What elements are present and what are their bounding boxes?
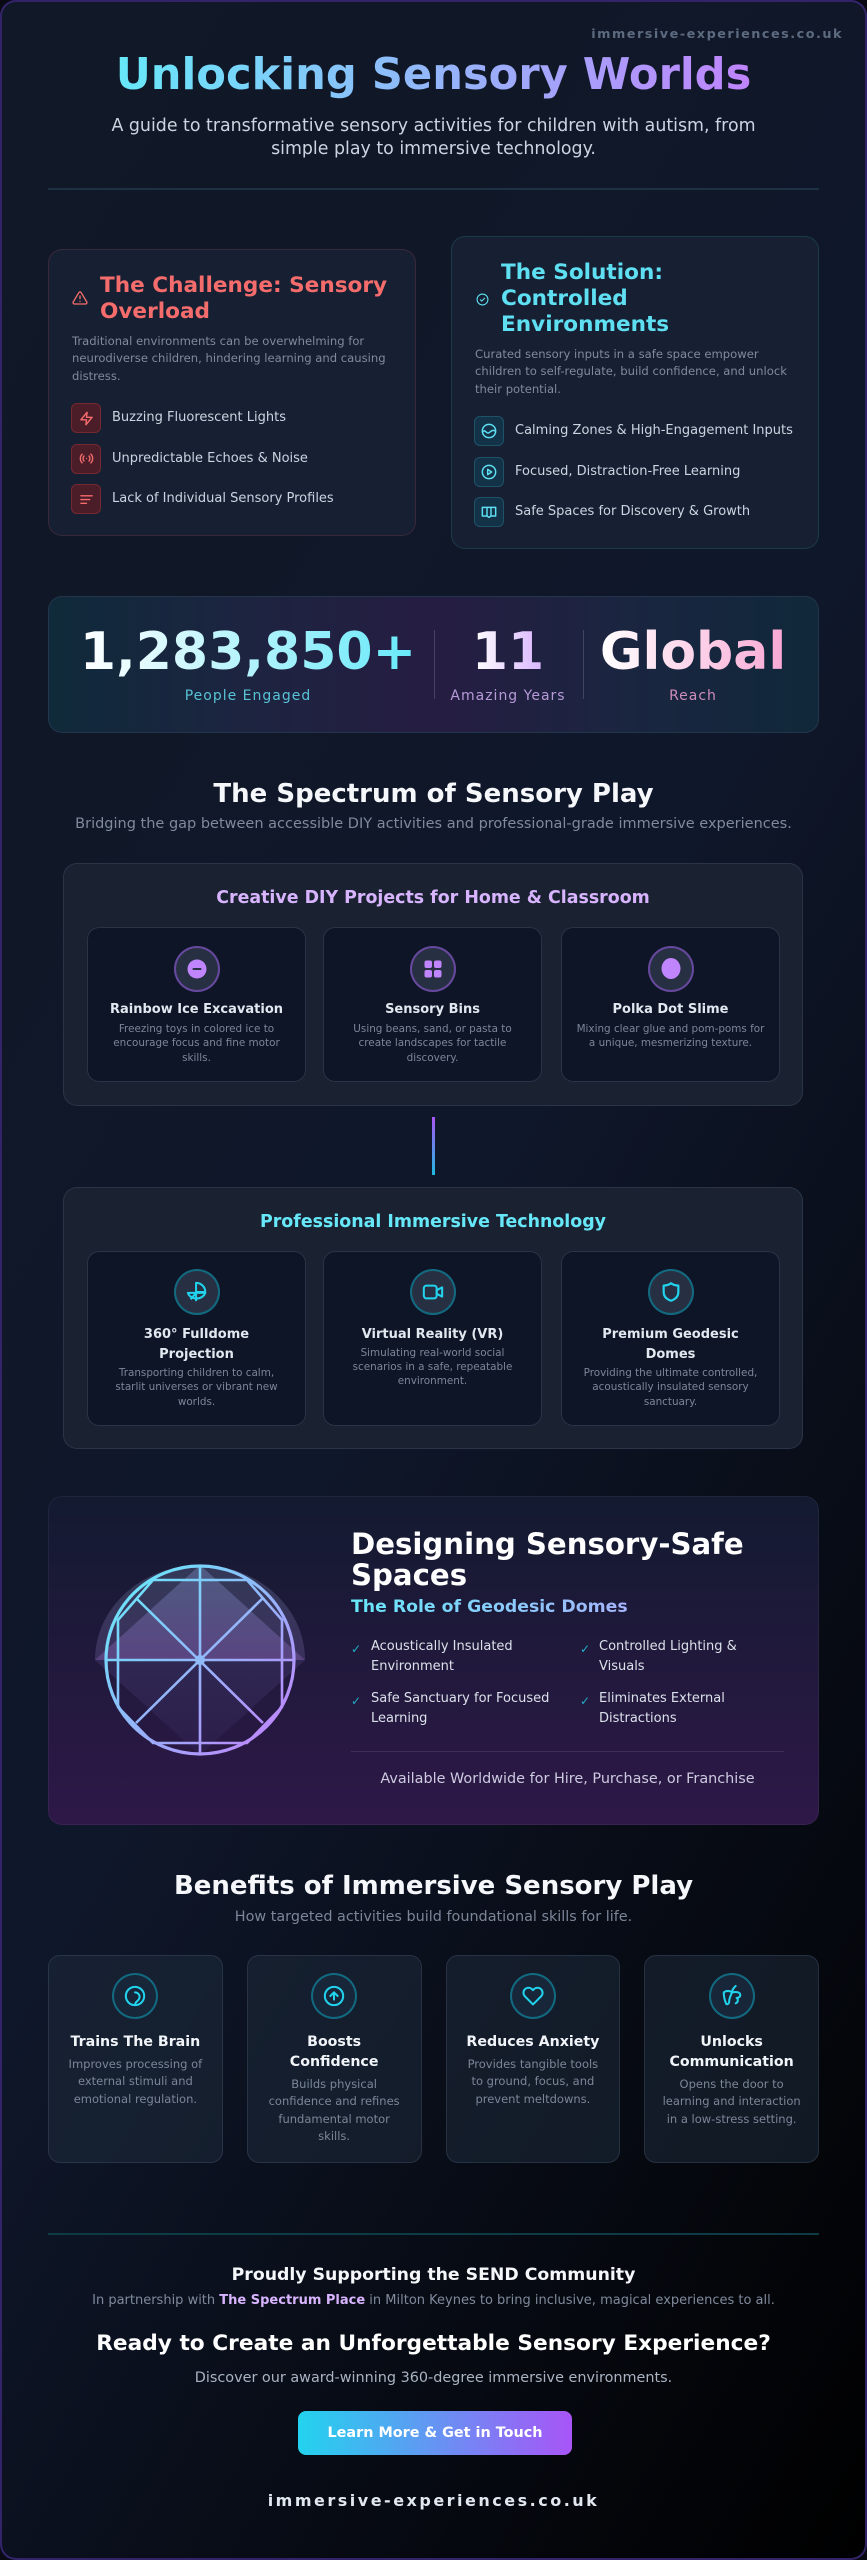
website url bottom: immersive-experiences.co.uk xyxy=(268,2491,599,2510)
button xyxy=(298,2411,572,2455)
partnership text: In partnership with The Spectrum Place in Milton Keynes to bring inclusive, magical experiences to all. xyxy=(92,2293,775,2308)
challenge description: distress. xyxy=(72,369,121,383)
card: geodesic domes: Premium Geodesic xyxy=(602,1327,739,1342)
card: rainbow ice: encourage focus and fine motor xyxy=(113,1037,280,1049)
card: sensory bins: Sensory Bins xyxy=(385,1002,480,1017)
feature 3: Safe Sanctuary for Focused xyxy=(371,1690,549,1706)
card: fulldome: Projection xyxy=(159,1347,234,1362)
icon: grid xyxy=(410,946,456,992)
card: boosts confidence: confidence and refines xyxy=(269,2094,400,2108)
challenge item 3: Lack of Individual Sensory Profiles xyxy=(112,491,334,506)
card: boosts confidence: Confidence xyxy=(290,2054,378,2070)
challenge heading: Overload xyxy=(100,299,210,324)
card: virtual reality: environment. xyxy=(398,1375,467,1387)
stat: amazing years: 11 xyxy=(472,622,544,682)
icon: warning triangle xyxy=(72,291,88,305)
icon: check circle xyxy=(476,294,488,306)
feature 3: Learning xyxy=(371,1711,427,1726)
card: boosts confidence: fundamental motor xyxy=(278,2112,390,2126)
card: virtual reality: scenarios in a safe, repeatable xyxy=(353,1361,512,1373)
panel: statistics xyxy=(48,596,819,733)
icon: calm sphere xyxy=(474,416,504,446)
solution description: their potential. xyxy=(475,382,561,396)
website url top right: immersive-experiences.co.uk xyxy=(591,27,843,42)
stat: people engaged: 1,283,850+ xyxy=(80,622,416,682)
solution description: Curated sensory inputs in a safe space empower xyxy=(475,347,759,361)
feature 4: Distractions xyxy=(599,1711,677,1726)
card: fulldome: worlds. xyxy=(178,1396,215,1408)
challenge description: neurodiverse children, hindering learning and causing xyxy=(72,351,386,365)
card: polka dot slime: Polka Dot Slime xyxy=(613,1002,728,1017)
feature 3 xyxy=(371,1690,549,1726)
solution item 3: Safe Spaces for Discovery & Growth xyxy=(515,504,750,519)
card: unlocks communication: learning and interaction xyxy=(663,2094,801,2108)
card: trains the brain xyxy=(48,1955,223,2163)
benefits subheading: How targeted activities build foundational skills for life. xyxy=(235,1909,632,1925)
card: fulldome: Transporting children to calm, xyxy=(119,1367,274,1379)
challenge heading: The Challenge: Sensory xyxy=(100,273,387,298)
card: virtual reality xyxy=(323,1251,542,1426)
challenge heading xyxy=(100,273,387,324)
card: geodesic domes xyxy=(561,1251,780,1426)
icon: shield xyxy=(648,1269,694,1315)
card: sensory bins: discovery. xyxy=(407,1052,458,1064)
dome heading: Designing Sensory-Safe xyxy=(351,1527,744,1561)
panel: professional technology xyxy=(63,1187,803,1449)
solution item 1: Calming Zones & High-Engagement Inputs xyxy=(515,423,793,438)
geodesic dome illustration xyxy=(95,1564,305,1756)
card: polka dot slime: a unique, mesmerizing texture. xyxy=(589,1037,752,1049)
feature list: ✓ xyxy=(351,1694,361,1708)
feature 2: Visuals xyxy=(599,1659,645,1674)
card: trains the brain: emotional regulation. xyxy=(74,2092,197,2106)
card: fulldome xyxy=(87,1251,306,1426)
solution description xyxy=(475,347,787,396)
panel: DIY projects xyxy=(63,863,803,1106)
card: trains the brain: Trains The Brain xyxy=(70,2034,200,2050)
card: sensory bins: Using beans, sand, or pasta to xyxy=(353,1023,512,1035)
card: rainbow ice: Freezing toys in colored ice to xyxy=(119,1023,274,1035)
subtitle: simple play to immersive technology. xyxy=(271,138,596,158)
card: geodesic domes: Providing the ultimate controlled, xyxy=(584,1367,757,1379)
card: trains the brain: external stimuli and xyxy=(78,2074,193,2088)
card: unlocks communication: Unlocks xyxy=(700,2034,763,2050)
icon: open book xyxy=(474,497,504,527)
card: boosts confidence: Builds physical xyxy=(291,2077,377,2091)
feature 2: Controlled Lighting & xyxy=(599,1638,737,1654)
subtitle xyxy=(111,116,756,158)
stat: global reach: Global xyxy=(600,622,786,682)
panel: solution xyxy=(451,236,819,549)
challenge description: Traditional environments can be overwhelming for xyxy=(72,334,364,348)
DIY heading: Creative DIY Projects for Home & Classroom xyxy=(216,888,650,908)
icon: video camera xyxy=(410,1269,456,1315)
icon: uneven lines xyxy=(71,484,101,514)
solution heading: Environments xyxy=(501,312,669,337)
card: polka dot slime: Mixing clear glue and pom-poms for xyxy=(577,1023,764,1035)
card: boosts confidence xyxy=(247,1955,422,2163)
stat: amazing years xyxy=(450,622,566,704)
feature 2 xyxy=(599,1638,737,1674)
dome subheading: The Role of Geodesic Domes xyxy=(351,1597,628,1617)
card: reduces anxiety: Provides tangible tools xyxy=(468,2057,598,2071)
solution heading xyxy=(501,260,669,337)
card: virtual reality: Virtual Reality (VR) xyxy=(362,1327,503,1342)
card: unlocks communication: Opens the door to xyxy=(680,2077,784,2091)
feature 1: Acoustically Insulated xyxy=(371,1638,513,1654)
spectrum heading: The Spectrum of Sensory Play xyxy=(213,779,654,809)
card: virtual reality: Simulating real-world social xyxy=(361,1346,504,1358)
solution description: children to self-regulate, build confidence, and unlock xyxy=(475,364,787,378)
card: fulldome: starlit universes or vibrant new xyxy=(115,1381,278,1393)
feature list xyxy=(351,1638,737,1726)
card: boosts confidence: Boosts xyxy=(307,2034,361,2050)
feature list: ✓ xyxy=(351,1642,361,1656)
card: reduces anxiety: Reduces Anxiety xyxy=(466,2034,599,2050)
community heading: Proudly Supporting the SEND Community xyxy=(232,2265,635,2285)
panel: challenge xyxy=(48,249,416,536)
card: geodesic domes: sanctuary. xyxy=(644,1396,697,1408)
solution item 2: Focused, Distraction-Free Learning xyxy=(515,464,740,478)
card: reduces anxiety: prevent meltdowns. xyxy=(475,2092,590,2106)
challenge item 2: Unpredictable Echoes & Noise xyxy=(112,450,308,466)
spectrum subheading: Bridging the gap between accessible DIY activities and professional-grade immersive experiences. xyxy=(75,816,792,832)
card: rainbow ice: skills. xyxy=(182,1052,211,1064)
card: boosts confidence: skills. xyxy=(318,2129,350,2143)
title: Unlocking Sensory Worlds xyxy=(116,50,751,100)
card: rainbow ice xyxy=(87,927,306,1082)
card: fulldome: 360° Fulldome xyxy=(144,1327,249,1342)
card: trains the brain: Improves processing of xyxy=(69,2057,202,2071)
card: sensory bins: create landscapes for tactile xyxy=(359,1037,506,1049)
solution heading: The Solution: xyxy=(501,260,663,285)
card: geodesic domes: Domes xyxy=(646,1347,695,1362)
card: geodesic domes: acoustically insulated sensory xyxy=(592,1381,749,1393)
icon: arrow up circle xyxy=(311,1973,357,2019)
icon: dome projection xyxy=(174,1269,220,1315)
dome heading xyxy=(351,1527,744,1592)
feature 4 xyxy=(599,1690,725,1726)
call to action text: Discover our award-winning 360-degree immersive environments. xyxy=(195,2370,672,2386)
icon: heart xyxy=(510,1973,556,2019)
card: reduces anxiety: to ground, focus, and xyxy=(471,2074,594,2088)
card: unlocks communication: Communication xyxy=(669,2054,794,2070)
icon: brain xyxy=(709,1973,755,2019)
button: Learn More & Get in Touch xyxy=(327,2425,543,2441)
dome heading: Spaces xyxy=(351,1558,467,1592)
icon: minus circle xyxy=(174,946,220,992)
icon: lightning xyxy=(71,403,101,433)
subtitle: A guide to transformative sensory activities for children with autism, from xyxy=(111,116,756,136)
connector line xyxy=(432,1117,435,1175)
stat: global reach: Reach xyxy=(669,688,717,704)
challenge item 1: Buzzing Fluorescent Lights xyxy=(112,410,286,425)
panel: geodesic domes xyxy=(48,1496,819,1825)
availability note: Available Worldwide for Hire, Purchase, or Franchise xyxy=(380,1771,755,1787)
feature 1 xyxy=(371,1638,513,1674)
feature list: ✓ xyxy=(580,1642,590,1656)
feature 1: Environment xyxy=(371,1659,454,1674)
card: reduces anxiety xyxy=(446,1955,620,2163)
icon: slime drop xyxy=(648,946,694,992)
solution heading: Controlled xyxy=(501,286,628,311)
card: unlocks communication xyxy=(644,1955,819,2163)
stat: amazing years: Amazing Years xyxy=(450,688,566,704)
challenge description xyxy=(72,334,386,383)
icon: sound waves xyxy=(71,444,101,474)
stat: people engaged: People Engaged xyxy=(185,688,311,704)
card: sensory bins xyxy=(323,927,542,1082)
feature 4: Eliminates External xyxy=(599,1690,725,1706)
benefits heading: Benefits of Immersive Sensory Play xyxy=(174,1871,693,1901)
card: rainbow ice: Rainbow Ice Excavation xyxy=(110,1002,283,1017)
professional heading: Professional Immersive Technology xyxy=(260,1212,606,1232)
icon: brain circle xyxy=(112,1973,158,2019)
call to action heading: Ready to Create an Unforgettable Sensory Experience? xyxy=(96,2331,771,2356)
feature list: ✓ xyxy=(580,1694,590,1708)
card: unlocks communication: in a low-stress setting. xyxy=(667,2112,797,2126)
icon: play circle xyxy=(474,456,504,486)
card: polka dot slime xyxy=(561,927,780,1082)
